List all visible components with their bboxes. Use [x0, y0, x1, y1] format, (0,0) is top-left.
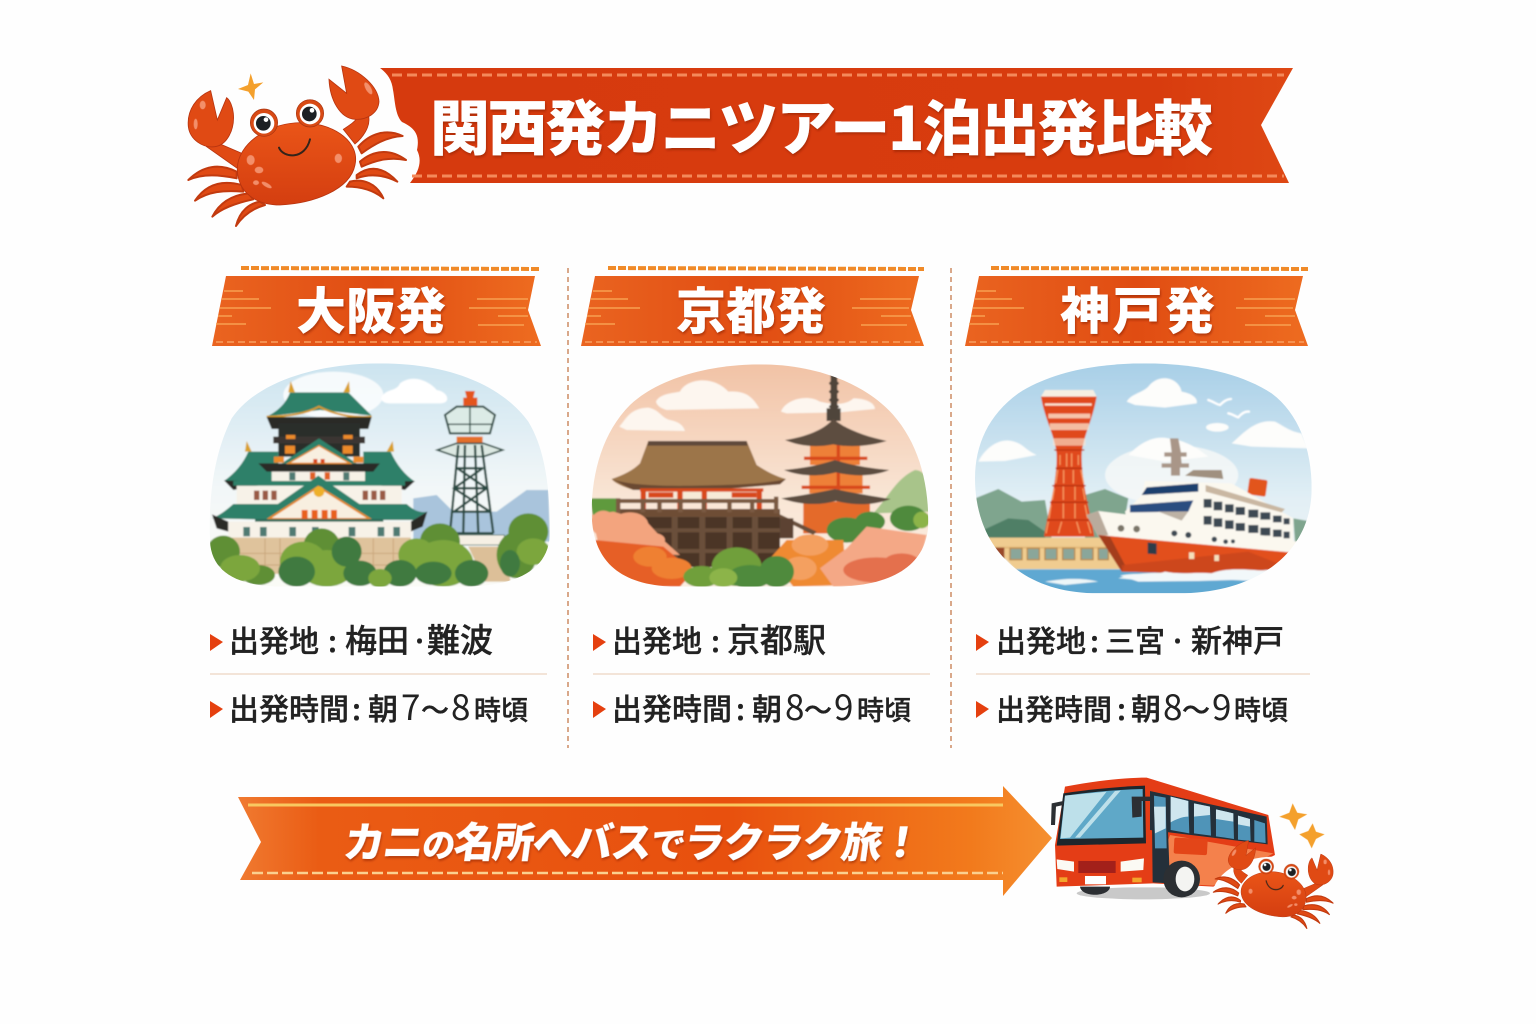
departure time: Kobe: ～ [1182, 689, 1210, 729]
departure place: Kyoto: : [711, 617, 720, 661]
icon: sparkle [238, 73, 263, 100]
departure place: Kobe [976, 616, 1284, 661]
departure place: Kyoto [593, 614, 826, 662]
illustration: Kobe Port Tower and ferry [975, 364, 1312, 594]
departure time: Osaka: 出発時間 [229, 685, 349, 729]
illustration: Kiyomizu temple and pagoda [592, 364, 928, 587]
departure time: Kobe: 9 [1212, 680, 1231, 731]
column dividers [568, 268, 951, 748]
departure time: Kyoto [593, 680, 911, 731]
departure time: Kyoto: ～ [804, 689, 832, 729]
panel: Kyoto [580, 268, 940, 731]
heading text: Kobe: 神戸発 [1060, 272, 1215, 344]
departure place: Kobe: · [1169, 617, 1186, 661]
departure time: Kobe [976, 680, 1288, 731]
departure time: Kyoto: 8 [785, 680, 804, 731]
departure time: Kobe: 8 [1163, 680, 1182, 731]
title banner [380, 68, 1293, 183]
departure time: Kyoto: 出発時間 [612, 685, 732, 729]
banner text: カニの名所へバスでラクラク旅！ [340, 809, 927, 869]
departure time: Kyoto: 9 [834, 680, 853, 731]
icon: crab mascot with sparkle [188, 66, 406, 226]
title text: 関西発カニツアー1泊出発比較 [430, 81, 1213, 168]
departure place: Kyoto: 京都駅 [727, 614, 826, 662]
departure time: Kobe: 時頃 [1234, 689, 1288, 728]
heading ribbon: Kobe [965, 268, 1308, 346]
departure time: Kyoto: 時頃 [857, 689, 911, 728]
departure place: Osaka [210, 614, 493, 662]
panel: Osaka [200, 268, 560, 731]
heading text: Kyoto: 京都発 [676, 272, 826, 344]
departure place: Kyoto: 出発地 [612, 617, 702, 661]
departure time: Kyoto: 朝 [752, 685, 782, 729]
departure place: Osaka: 梅田 [345, 616, 409, 662]
departure place: Kobe: 三宮 [1105, 617, 1165, 661]
heading text: Osaka: 大阪発 [296, 272, 446, 344]
arrow banner [238, 786, 1052, 896]
departure place: Kobe: : [1090, 617, 1099, 661]
departure time: Osaka: : [352, 685, 361, 729]
icon: sparkles [1279, 803, 1325, 848]
departure time: Osaka: ～ [421, 689, 449, 729]
departure place: Osaka: 難波 [427, 614, 493, 662]
heading ribbon: Kyoto [581, 268, 924, 346]
departure time: Osaka: 7 [401, 680, 420, 731]
panel: Kobe [965, 268, 1325, 731]
departure time: Kyoto: : [736, 685, 745, 729]
illustration: Osaka Castle and Tsutenkaku [210, 364, 550, 587]
icon: tour bus [1051, 778, 1335, 940]
departure place: Kobe: 新神戸 [1191, 616, 1284, 661]
departure place: Osaka: : [328, 617, 337, 661]
departure place: Kobe: 出発地 [996, 617, 1086, 661]
icon: small crab [1213, 840, 1333, 928]
departure place: Osaka: 出発地 [229, 617, 319, 661]
departure time: Kobe: : [1117, 685, 1126, 729]
departure time: Osaka: 8 [451, 680, 470, 731]
departure time: Osaka: 朝 [368, 685, 398, 729]
departure time: Osaka [210, 680, 528, 731]
heading ribbon: Osaka [212, 268, 541, 346]
departure time: Kobe: 朝 [1131, 685, 1161, 729]
departure place: Osaka: · [411, 617, 428, 661]
departure time: Osaka: 時頃 [474, 689, 528, 728]
departure time: Kobe: 出発時間 [996, 687, 1112, 729]
